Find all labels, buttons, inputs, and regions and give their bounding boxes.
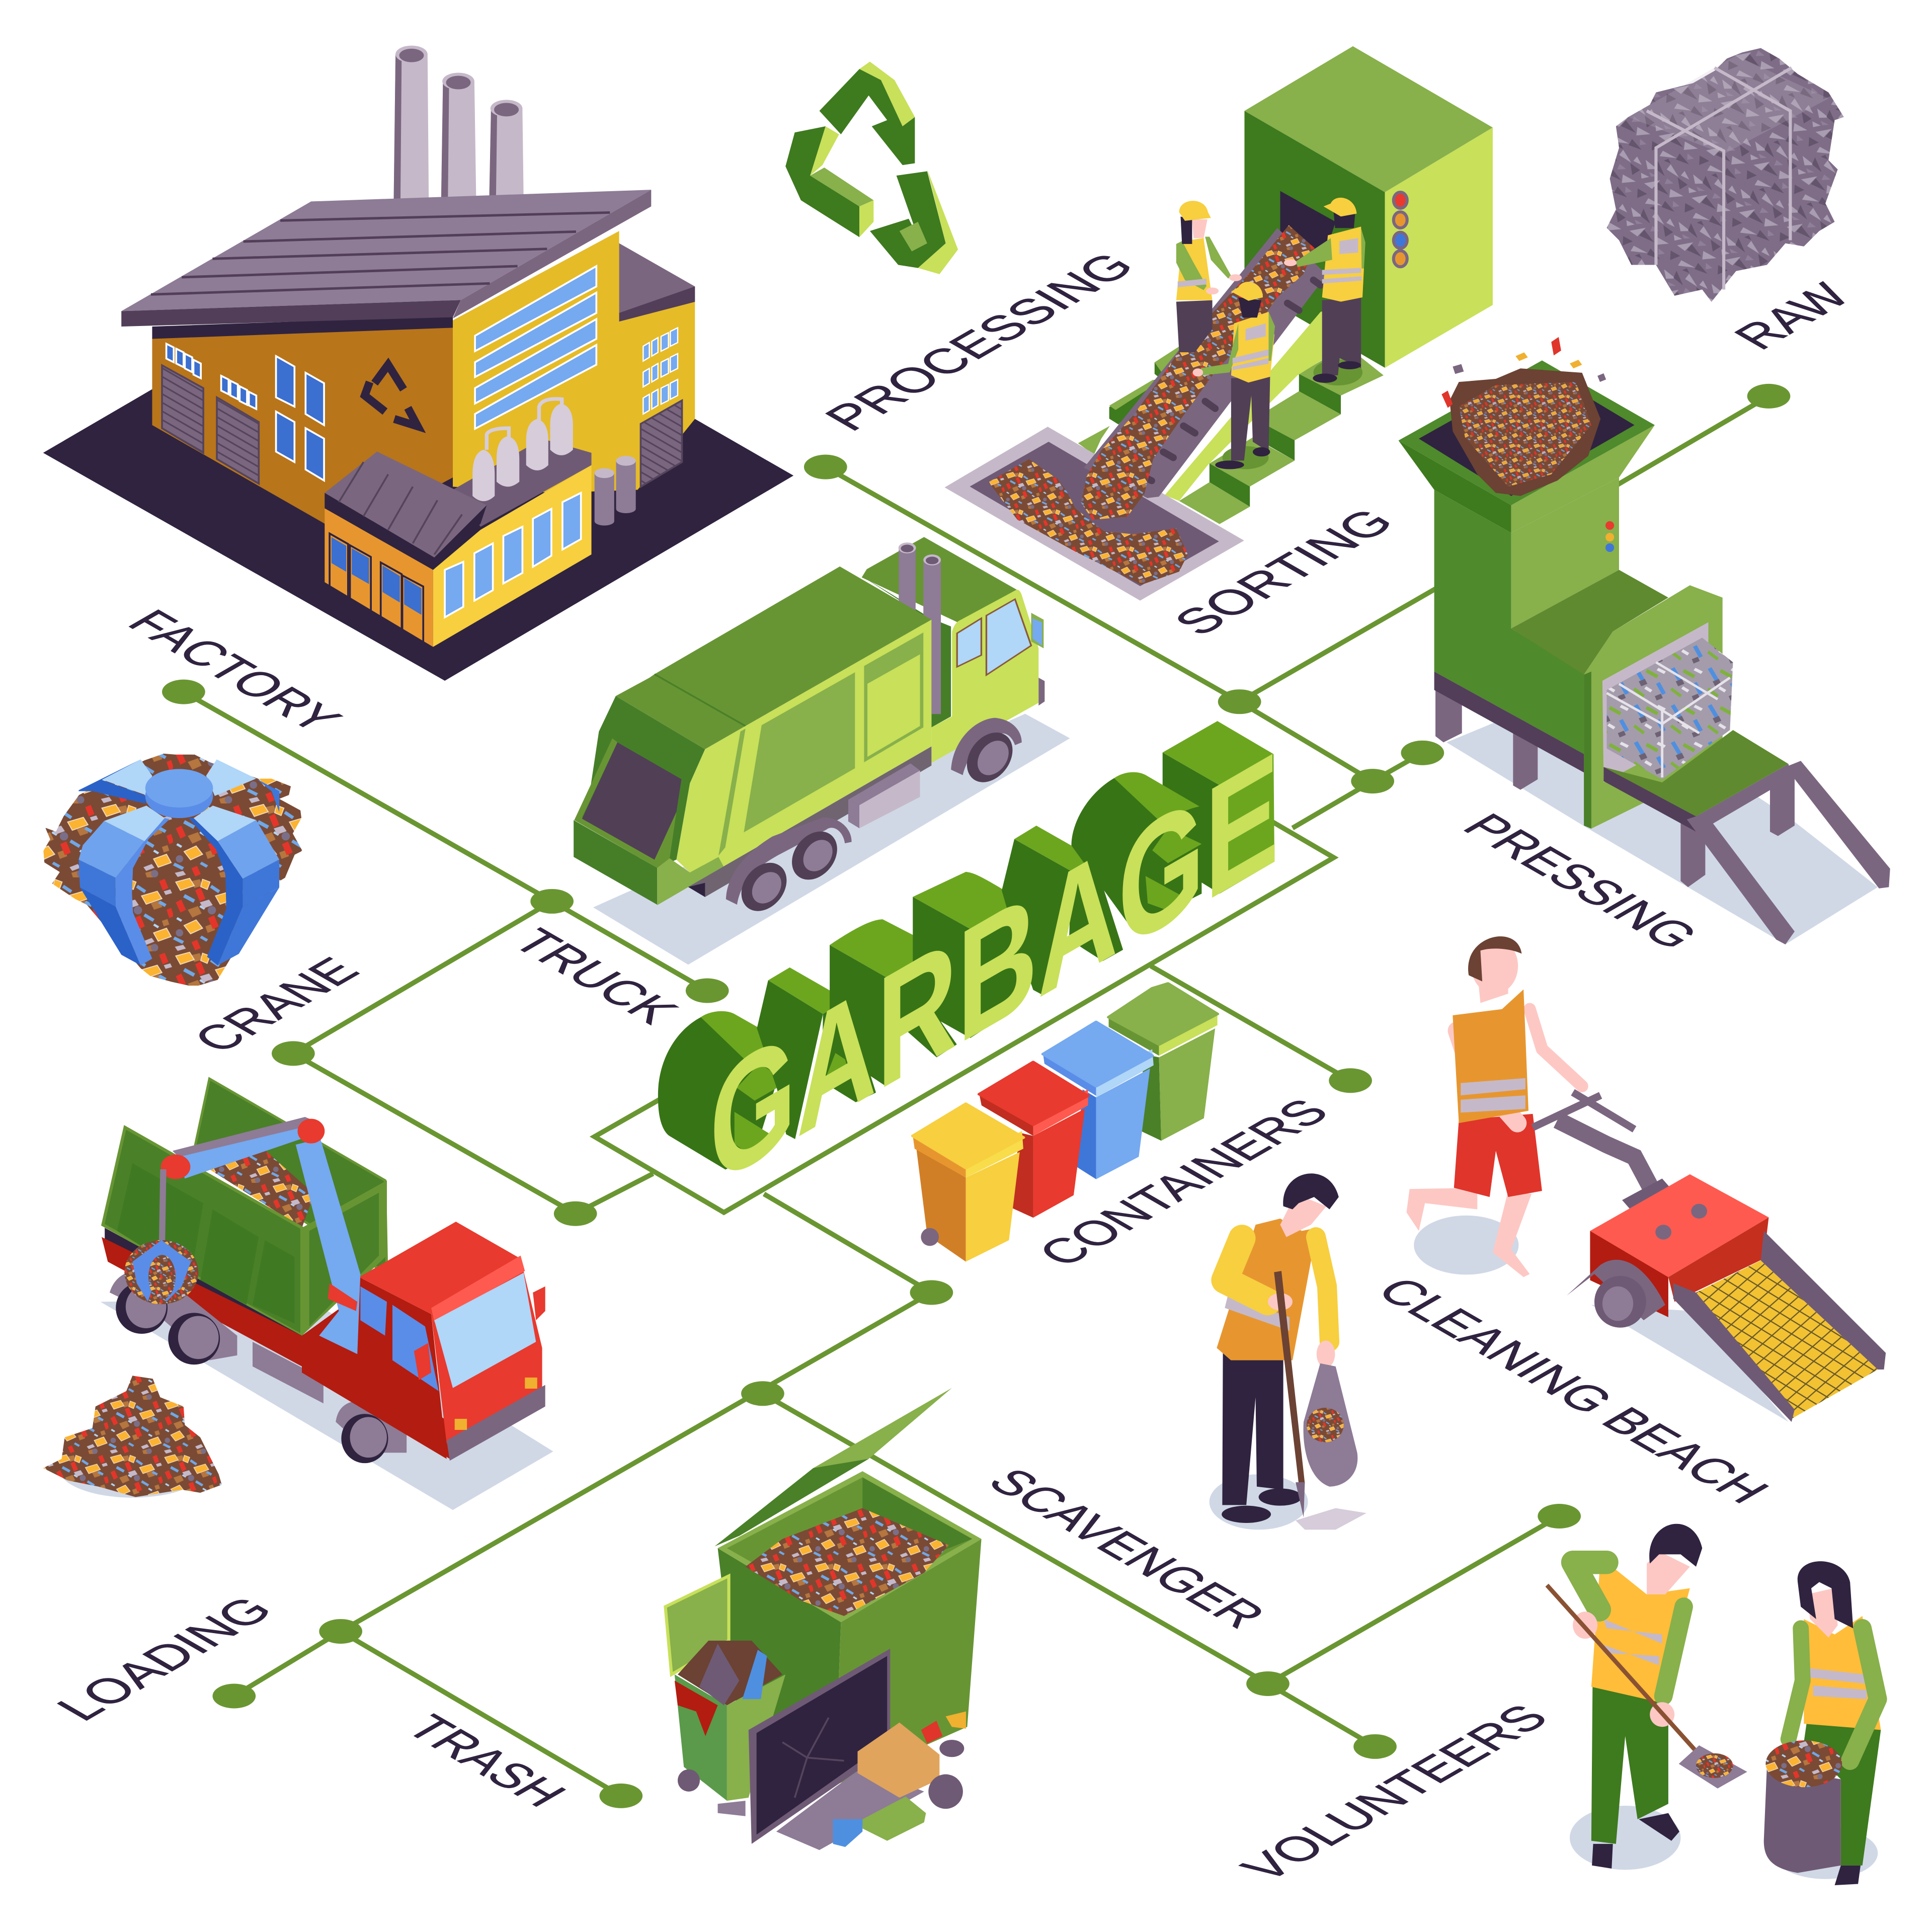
book — [862, 1797, 926, 1841]
volunteers — [1547, 1524, 1881, 1885]
label: loading: LOADING — [44, 1589, 284, 1728]
connector nodes — [162, 384, 1790, 1808]
rake and dustpan — [1547, 1585, 1699, 1754]
hopper — [1399, 441, 1511, 533]
machine wheel — [1567, 1260, 1665, 1320]
trash heap in hopper — [1450, 368, 1600, 496]
sorting machine — [1244, 46, 1493, 368]
label: trash: TRASH — [394, 1708, 579, 1814]
label: processing: PROCESSING — [813, 246, 1146, 438]
worker right — [1284, 198, 1365, 385]
roof tanks — [472, 399, 573, 501]
woman sleeves — [1789, 1628, 1803, 1739]
recycling icon on wall — [365, 365, 418, 426]
big title word GARBAGE — [658, 716, 1279, 1222]
label: cleaning beach: CLEANING BEACH — [1365, 1270, 1782, 1510]
woman head — [1807, 1588, 1838, 1638]
raw material bale — [1606, 48, 1844, 302]
truck cargo top — [655, 567, 931, 726]
label: volunteers: VOLUNTEERS — [1229, 1697, 1560, 1888]
pants — [1222, 1351, 1283, 1505]
garbage bag — [1304, 1363, 1357, 1487]
exhaust pipes — [899, 542, 941, 714]
crane claw with trash — [43, 754, 302, 986]
cable — [162, 1169, 163, 1243]
label: pressing: PRESSING — [1452, 806, 1711, 956]
press body — [1434, 490, 1585, 755]
claw right jaw — [194, 806, 256, 841]
chassis — [105, 1228, 302, 1351]
icon: recycling arrows — [785, 61, 958, 274]
truck box and wheels — [253, 1342, 324, 1403]
chimneys — [393, 46, 524, 203]
press shadow — [1446, 684, 1878, 944]
legs — [1407, 1188, 1477, 1231]
machine buttons — [1394, 192, 1407, 267]
press ramp table — [1603, 730, 1789, 816]
dumpster body — [718, 1548, 841, 1786]
man sleeves — [1573, 1562, 1606, 1610]
claw trash mass — [43, 754, 302, 986]
red truck shadow — [101, 1299, 553, 1510]
yellow bin — [913, 1104, 1023, 1262]
conveyor area — [945, 198, 1384, 601]
right wing small windows — [643, 328, 678, 414]
cab — [302, 1277, 447, 1459]
paper — [1296, 1508, 1366, 1530]
pit — [945, 427, 1244, 601]
dump box — [194, 1079, 387, 1274]
label: crane: CRANE — [181, 950, 370, 1060]
truck cab front — [931, 590, 1038, 763]
letter blocks — [658, 721, 1274, 1170]
label: scavenger: SCAVENGER — [977, 1461, 1278, 1635]
truck side — [676, 620, 931, 872]
long blue windows — [475, 266, 596, 429]
conveyor support — [1165, 306, 1344, 501]
truck cab back — [862, 537, 1017, 622]
mesh ramp — [1696, 1260, 1878, 1419]
left wall windows — [167, 344, 324, 480]
head — [1468, 936, 1521, 1003]
green bin — [1109, 984, 1218, 1141]
broken tv — [749, 1649, 890, 1844]
person shadow — [1414, 1216, 1518, 1274]
GARBAGE letters: GARBAGE — [710, 716, 1279, 1222]
back roof — [616, 242, 695, 324]
factory ground — [43, 388, 793, 681]
shutter doors — [162, 365, 682, 487]
beach cleaning person and machine — [1407, 936, 1886, 1422]
machine cabinet — [1244, 46, 1493, 192]
head — [1280, 1194, 1326, 1237]
woman vest — [1804, 1616, 1881, 1730]
press buttons — [1605, 521, 1614, 552]
machine shadow — [1591, 1305, 1789, 1422]
shorts — [1454, 1114, 1542, 1197]
man pants — [1591, 1687, 1668, 1844]
cylinders — [595, 456, 636, 525]
trash pile — [43, 1376, 222, 1497]
truck shadow — [593, 714, 1070, 964]
arms — [1457, 1031, 1517, 1123]
truck rear — [574, 696, 705, 868]
label: raw: RAW — [1722, 276, 1862, 356]
lid — [739, 1388, 952, 1536]
pressing machine — [1399, 337, 1890, 944]
front fender and wheel — [951, 718, 1022, 775]
hand and stick — [1268, 1293, 1293, 1310]
left steps — [1078, 347, 1185, 455]
woman pants — [1804, 1721, 1881, 1866]
bale straps — [1647, 68, 1792, 290]
claw back wings — [78, 759, 146, 803]
man shadow — [1570, 1806, 1680, 1870]
crane arm — [296, 1139, 360, 1354]
vest — [1453, 990, 1528, 1123]
belt — [1084, 228, 1326, 498]
factory illustration — [43, 46, 793, 681]
volunteer sack — [1764, 1767, 1841, 1873]
big dumpster and trash — [665, 1388, 982, 1850]
press legs — [1435, 675, 1795, 887]
conveyor trash — [1081, 225, 1315, 520]
bale straps — [1606, 662, 1730, 777]
blue bin — [1043, 1022, 1154, 1179]
stand — [776, 1767, 924, 1850]
scavenger person — [1210, 1173, 1366, 1530]
rear wheels — [733, 826, 846, 917]
main roof — [152, 316, 453, 339]
man head — [1647, 1551, 1690, 1594]
garbage truck illustration — [574, 537, 1070, 964]
blue bottle — [833, 1819, 862, 1847]
small bin — [665, 1576, 729, 1674]
small bags — [928, 1740, 964, 1809]
worker center — [1193, 282, 1275, 469]
label: factory: FACTORY — [117, 602, 353, 739]
claw left jaw — [104, 806, 165, 841]
connector lines — [184, 396, 1769, 1796]
machine handle — [1533, 1092, 1659, 1203]
press front box — [1584, 585, 1723, 829]
ground shadow under pile — [58, 1438, 206, 1498]
containers: colored bins — [913, 984, 1218, 1262]
small claw — [124, 1240, 198, 1304]
worker woman — [1176, 201, 1242, 352]
claw hub — [145, 774, 213, 818]
red dump truck with crane — [43, 1079, 553, 1510]
rear fender — [726, 818, 852, 905]
side box — [848, 763, 920, 828]
truck undercarriage — [688, 747, 931, 897]
machine body — [1590, 1174, 1769, 1277]
front annex — [325, 439, 592, 647]
label: sorting: SORTING — [1161, 501, 1406, 642]
red bin — [979, 1062, 1088, 1218]
man vest — [1591, 1558, 1690, 1702]
label: containers: CONTAINERS — [1026, 1091, 1340, 1273]
label: truck: TRUCK — [501, 921, 690, 1031]
bale top highlight — [1628, 55, 1828, 154]
vest — [1217, 1219, 1317, 1360]
screen crack — [782, 1718, 844, 1798]
woman shadow — [1773, 1827, 1878, 1879]
sleeves — [1225, 1238, 1268, 1302]
scavenger shadow — [1210, 1474, 1308, 1530]
cardboard box — [857, 1723, 939, 1798]
factory walls — [152, 327, 453, 536]
right steps — [1179, 346, 1384, 524]
